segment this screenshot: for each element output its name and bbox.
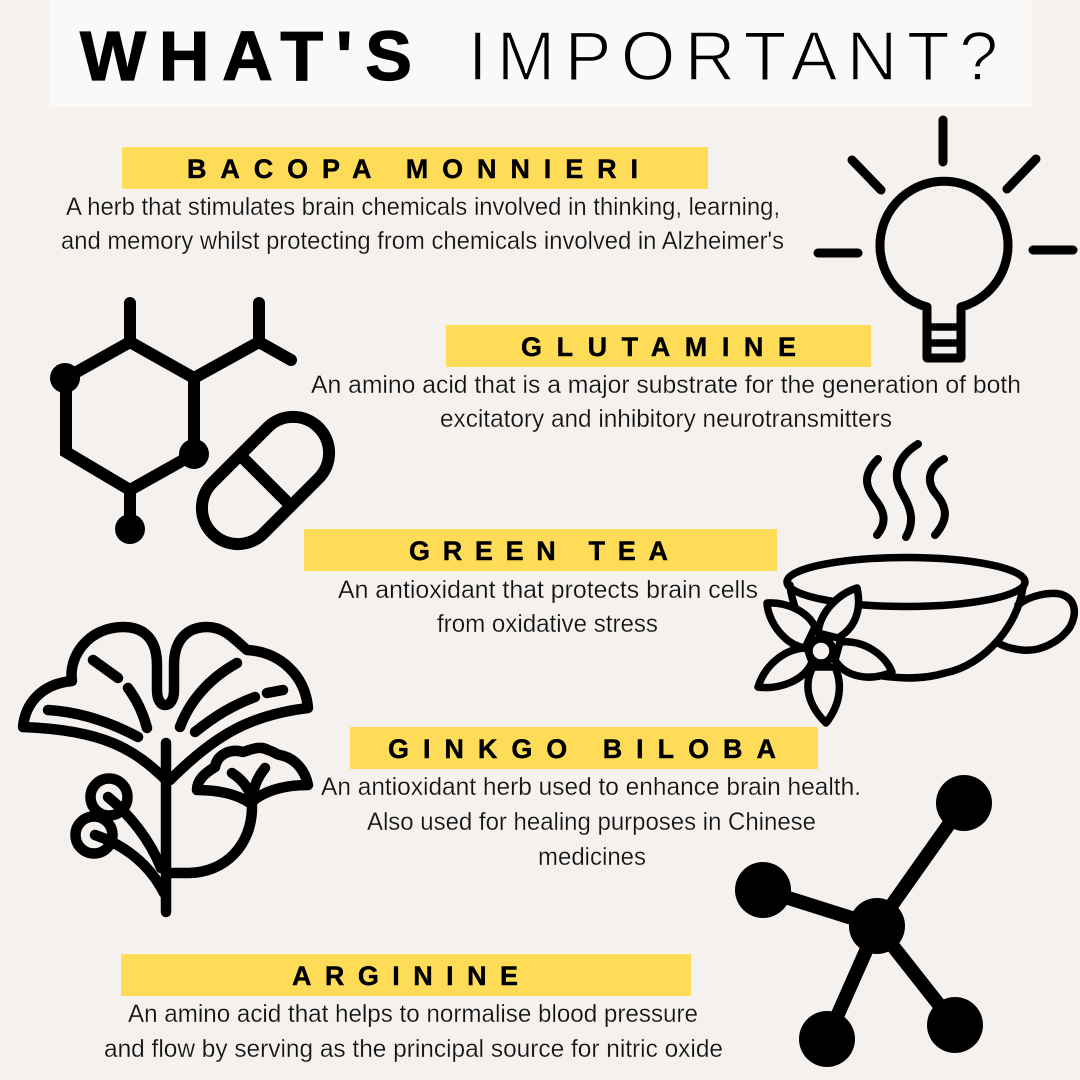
text: green tea description	[338, 576, 758, 638]
heading: arginine: ARGININE	[292, 961, 518, 991]
icon: molecule structure	[50, 303, 291, 544]
heading: bacopa monnieri: BACOPA MONNIERI	[187, 154, 638, 184]
text: glutamine description: excitatory and inhibitory neurotransmitters	[440, 405, 892, 433]
section: glutamine	[311, 325, 1021, 433]
title: bold part: WHAT'S	[80, 17, 412, 95]
icon: ball and stick molecule	[735, 775, 992, 1067]
text: bacopa description: and memory whilst protecting from chemicals involved in Alzheimer's	[61, 227, 784, 255]
section: bacopa monnieri	[61, 147, 784, 255]
text: ginkgo description: Also used for healing purposes in Chinese	[367, 808, 816, 836]
icon: ginkgo biloba plant	[23, 627, 308, 912]
text: bacopa description	[61, 193, 784, 255]
heading: ginkgo biloba: GINKGO BILOBA	[388, 734, 776, 764]
text: arginine description: An amino acid that helps to normalise blood pressure	[128, 1000, 698, 1028]
text: green tea description: from oxidative stress	[437, 610, 658, 638]
title: thin part: IMPORTANT?	[468, 17, 998, 95]
heading: green tea: GREEN TEA	[409, 536, 668, 566]
title banner	[49, 0, 1032, 107]
icon: tea cup with flower	[758, 444, 1074, 723]
icon: light bulb	[818, 120, 1073, 358]
text: green tea description: An antioxidant that protects brain cells	[338, 576, 758, 604]
text: ginkgo description	[321, 773, 861, 871]
section: green tea	[304, 529, 777, 638]
icon: capsule pill	[187, 402, 344, 559]
text: ginkgo description: An antioxidant herb used to enhance brain health.	[321, 773, 861, 801]
heading: glutamine: GLUTAMINE	[521, 332, 796, 362]
text: arginine description	[104, 1000, 723, 1063]
text: arginine description: and flow by serving as the principal source for nitric oxide	[104, 1035, 723, 1063]
section: arginine	[104, 954, 723, 1063]
text: bacopa description: A herb that stimulates brain chemicals involved in thinking, learning,	[66, 193, 780, 221]
text: glutamine description: An amino acid that is a major substrate for the generation of both	[311, 371, 1021, 399]
text: ginkgo description: medicines	[538, 843, 646, 871]
text: glutamine description	[311, 371, 1021, 433]
flower	[758, 588, 892, 723]
section: ginkgo biloba	[321, 727, 861, 871]
